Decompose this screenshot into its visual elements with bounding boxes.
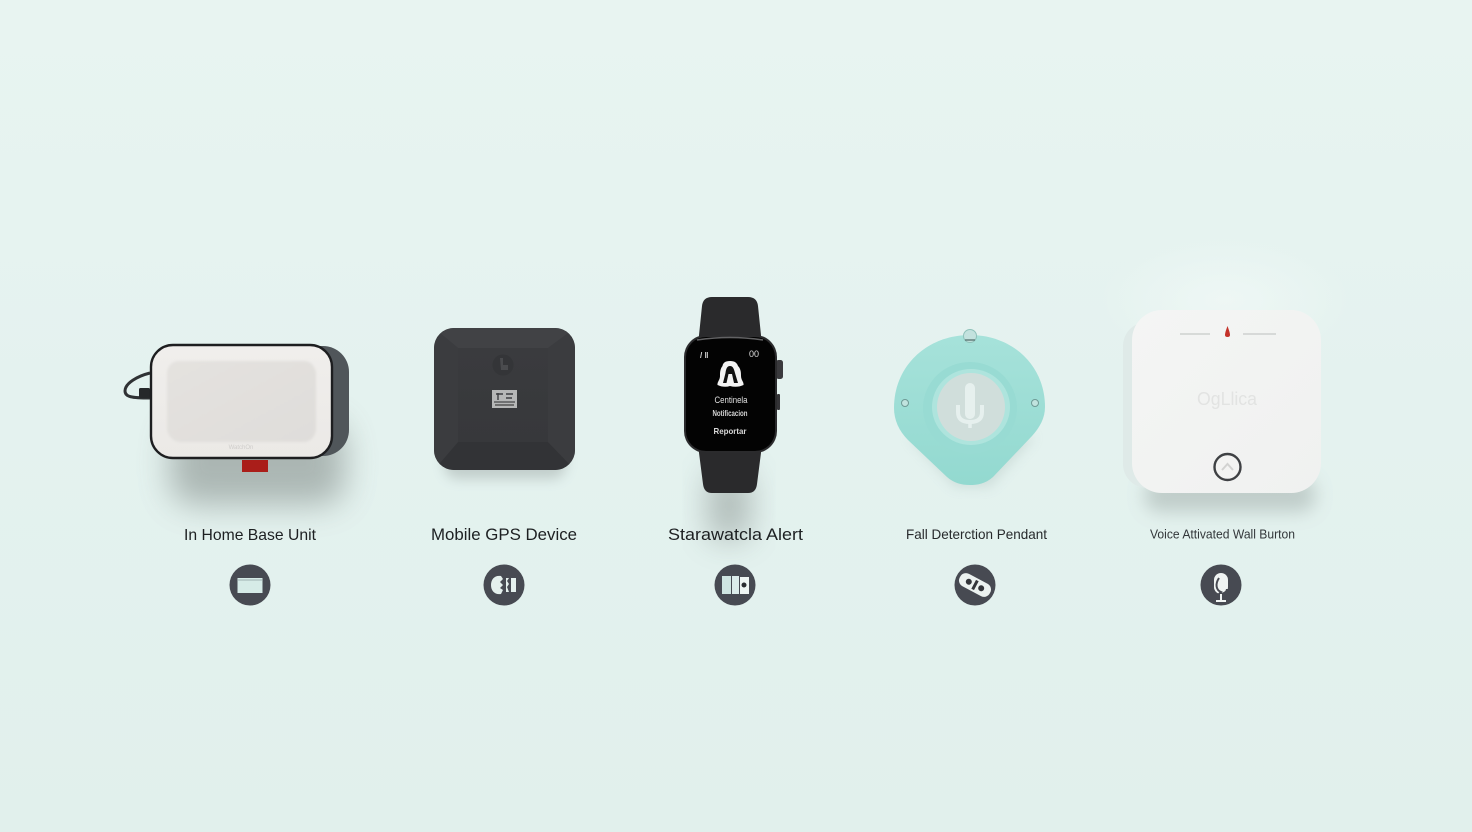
gps device center plate <box>458 348 548 442</box>
watch text line 2: Notificacion <box>712 408 748 418</box>
wall button side <box>1123 322 1273 488</box>
watch status text: / ‖ <box>700 351 708 360</box>
shadow: base unit <box>170 420 345 505</box>
pendant top loop <box>964 330 976 342</box>
icon: base unit cable <box>125 373 150 398</box>
shadow: watch <box>708 470 750 540</box>
watch band <box>698 297 762 493</box>
gps device body <box>434 328 575 470</box>
panel: in home base unit <box>125 345 349 505</box>
wall button right line <box>1243 333 1276 335</box>
panel: smartwatch <box>684 297 783 540</box>
watch screen <box>686 337 775 451</box>
label: mobile gps device: Mobile GPS Device <box>431 525 577 544</box>
watch text line 1: Centinela <box>714 395 748 405</box>
shadow: pendant <box>908 436 1035 487</box>
watch crown <box>776 360 783 410</box>
icon: bell <box>717 361 744 387</box>
pendant inner ring <box>932 369 1010 445</box>
watch status number: 00 <box>749 349 759 359</box>
gps device label <box>492 390 517 408</box>
pendant raised ring <box>923 362 1017 454</box>
pendant body <box>894 335 1045 485</box>
shadow: wall button <box>1145 478 1315 512</box>
panel: voice activated wall button <box>1100 235 1350 512</box>
icon: pendant badge <box>954 564 996 606</box>
icon: microphone <box>958 388 982 428</box>
pendant button <box>937 373 1005 441</box>
wall button control <box>1214 454 1240 480</box>
panel: mobile gps device <box>434 328 575 479</box>
icon: gps badge <box>484 564 524 606</box>
icon: base unit badge <box>230 564 270 606</box>
panel: fall detection pendant <box>894 330 1045 487</box>
wall button red led <box>1225 326 1230 337</box>
wall button face <box>1132 310 1321 493</box>
wall button left line <box>1180 333 1210 335</box>
base unit red tab <box>242 460 268 472</box>
label: starawatcla alert: Starawatcla Alert <box>668 525 803 544</box>
base unit front face <box>151 345 332 458</box>
watch case <box>684 335 777 453</box>
label: fall detection pendant: Fall Deterction Pendant <box>906 526 1047 542</box>
icon: microphone badge <box>1200 564 1242 606</box>
shadow: gps device <box>444 445 566 479</box>
label: in home base unit: In Home Base Unit <box>184 527 317 544</box>
pendant right screw <box>1032 400 1038 406</box>
icon: watch badge <box>714 564 756 606</box>
wall button embossed logo: OgLlica <box>1197 389 1258 409</box>
watch top highlight <box>697 338 763 340</box>
glow: wall button <box>1100 235 1350 365</box>
base unit embossed text: WatchOn <box>229 445 253 451</box>
pendant left screw <box>902 400 908 406</box>
gps device knob <box>492 354 514 376</box>
base unit inner panel <box>167 361 316 442</box>
watch text line 3: Reportar <box>714 426 747 436</box>
label: voice activated wall button: Voice Attivated Wall Burton <box>1150 528 1295 542</box>
gps device bevels <box>434 328 575 470</box>
base unit rear housing <box>270 346 349 456</box>
